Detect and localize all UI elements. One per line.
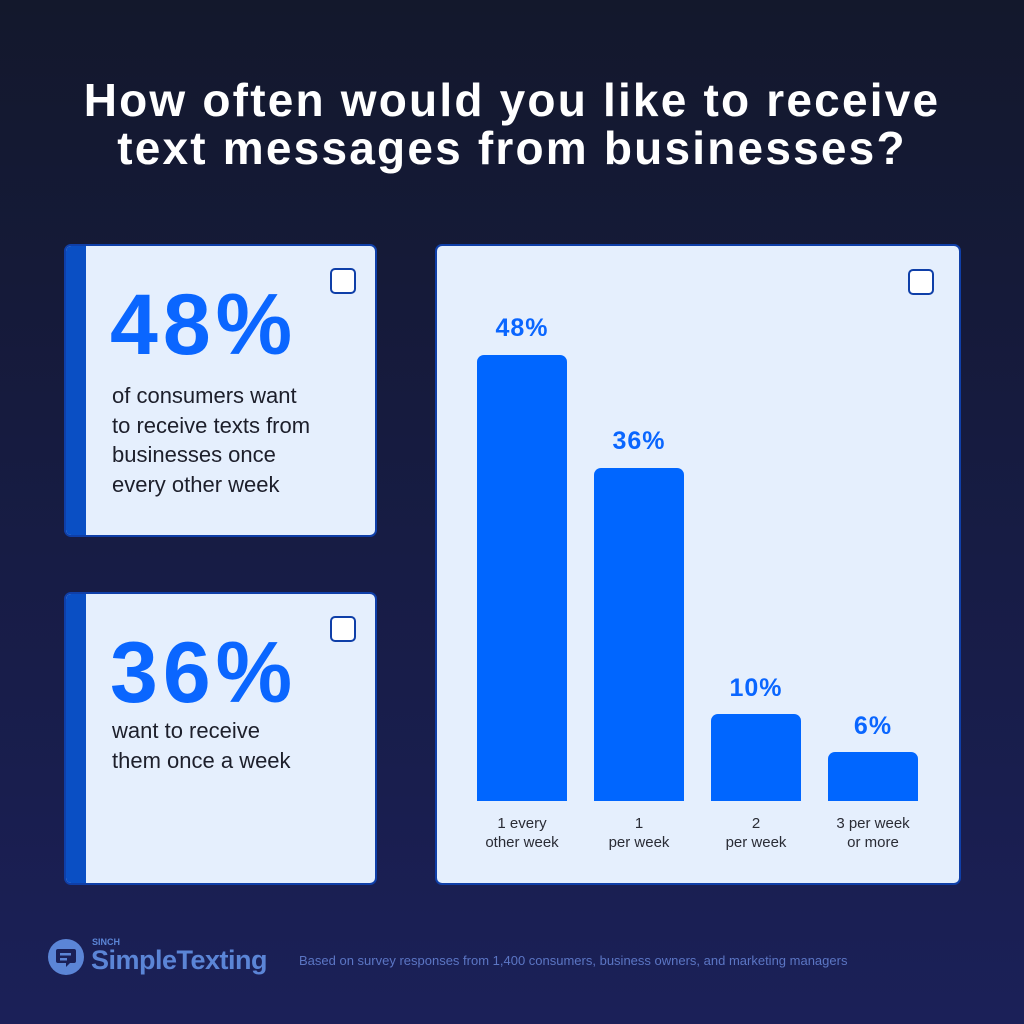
stat number 48%: 48% [110, 277, 297, 373]
panel: 36% stat [64, 592, 377, 885]
bar chart: 10% [729, 674, 783, 702]
bar chart: 2 [752, 815, 760, 832]
bar chart: 6% [854, 712, 892, 740]
bar chart: 1 [635, 815, 643, 832]
title: How often would you like to receive [84, 74, 940, 126]
icon: checkbox [330, 616, 356, 642]
title [84, 74, 940, 174]
stat description: every other week [112, 472, 280, 496]
logo: SimpleTexting [91, 945, 267, 975]
stat description [112, 718, 291, 772]
bar chart: per week [726, 834, 786, 851]
stat description: to receive texts from [112, 412, 310, 438]
stat description: want to receive [112, 718, 260, 743]
panel: bar chart [435, 244, 961, 885]
logo: SINCH [92, 937, 120, 947]
panel: 48% stat [64, 244, 377, 537]
footnote: Based on survey responses from 1,400 consumers, business owners, and marketing managers [299, 953, 847, 968]
icon: checkbox [908, 269, 934, 295]
bar chart: or more [847, 834, 899, 851]
bar chart [477, 314, 918, 851]
bar chart: 48% [495, 314, 549, 342]
stat description [112, 383, 310, 496]
stat description: businesses once [112, 442, 276, 467]
stat number 36%: 36% [110, 625, 297, 721]
bar chart: 3 per week [836, 815, 910, 832]
icon: checkbox [330, 268, 356, 294]
stat description: them once a week [112, 748, 291, 772]
title: text messages from businesses? [117, 122, 907, 174]
bar chart: per week [609, 834, 669, 851]
icon: chat bubble [48, 939, 84, 975]
bar chart: 36% [612, 427, 666, 455]
stat description: of consumers want [112, 383, 297, 408]
logo [48, 937, 267, 975]
bar chart: 1 every [497, 815, 547, 832]
bar chart: other week [485, 834, 559, 851]
